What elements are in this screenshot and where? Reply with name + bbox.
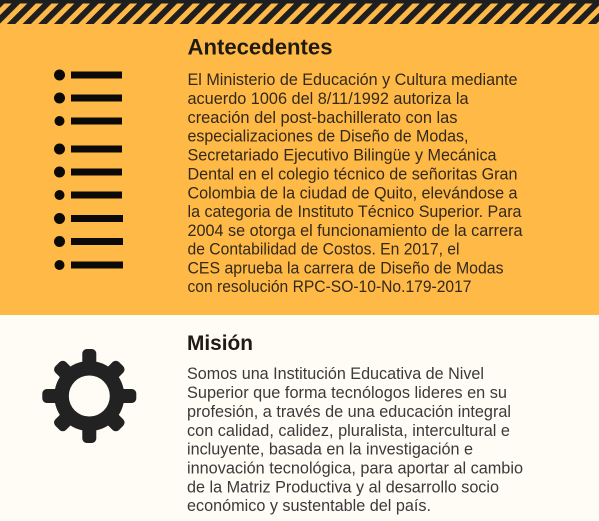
text block: misión bbox=[187, 365, 523, 515]
text block: misión: con calidad, calidez, pluralista, intercultural e bbox=[187, 422, 510, 440]
heading: antecedentes: Antecedentes bbox=[188, 34, 332, 60]
text block: antecedentes: especializaciones de Diseño de Modas, bbox=[188, 128, 468, 146]
text block: antecedentes: El Ministerio de Educación y Cultura mediante bbox=[188, 71, 518, 89]
text block: antecedentes: 2004 se otorga el funcionamiento de la carrera bbox=[188, 222, 522, 240]
text block: antecedentes: acuerdo 1006 del 8/11/1992 autoriza la bbox=[188, 90, 468, 108]
icon: list bbox=[54, 70, 123, 270]
text block: antecedentes: Colombia de la ciudad de Quito, elevándose a bbox=[188, 184, 518, 202]
text block: misión: profesión, a través de una educación integral bbox=[187, 403, 511, 421]
text block: antecedentes: Secretariado Ejecutivo Bilingüe y Mecánica bbox=[188, 147, 496, 165]
text block: misión: económico y sustentable del país. bbox=[187, 497, 431, 515]
text block: antecedentes: creación del post-bachillerato con las bbox=[188, 109, 458, 127]
text block: misión: innovación tecnológica, para aportar al cambio bbox=[187, 460, 523, 478]
text block: antecedentes: la categoria de Instituto Técnico Superior. Para bbox=[188, 203, 522, 221]
text block: antecedentes: Dental en el colegio técnico de señoritas Gran bbox=[188, 165, 518, 183]
panel: misión bbox=[0, 315, 599, 521]
text block: misión: incluyente, basada en la investigación e bbox=[187, 441, 473, 459]
heading: misión: Misión bbox=[187, 331, 253, 355]
text block: misión: Somos una Institución Educativa de Nivel bbox=[187, 365, 484, 383]
text block: antecedentes: con resolución RPC-SO-10-No.179-2017 bbox=[188, 278, 472, 296]
icon: gear bbox=[42, 349, 136, 443]
panel: antecedentes bbox=[0, 0, 599, 315]
text block: misión: de la Matriz Productiva y al desarrollo socio bbox=[187, 478, 499, 496]
text block: misión: Superior que forma tecnólogos lideres en su bbox=[187, 384, 507, 402]
hazard stripe band bbox=[0, 0, 599, 24]
text block: antecedentes: CES aprueba la carrera de Diseño de Modas bbox=[188, 260, 504, 278]
text block: antecedentes: de Contabilidad de Costos. En 2017, el bbox=[188, 241, 460, 259]
text block: antecedentes bbox=[188, 71, 522, 296]
